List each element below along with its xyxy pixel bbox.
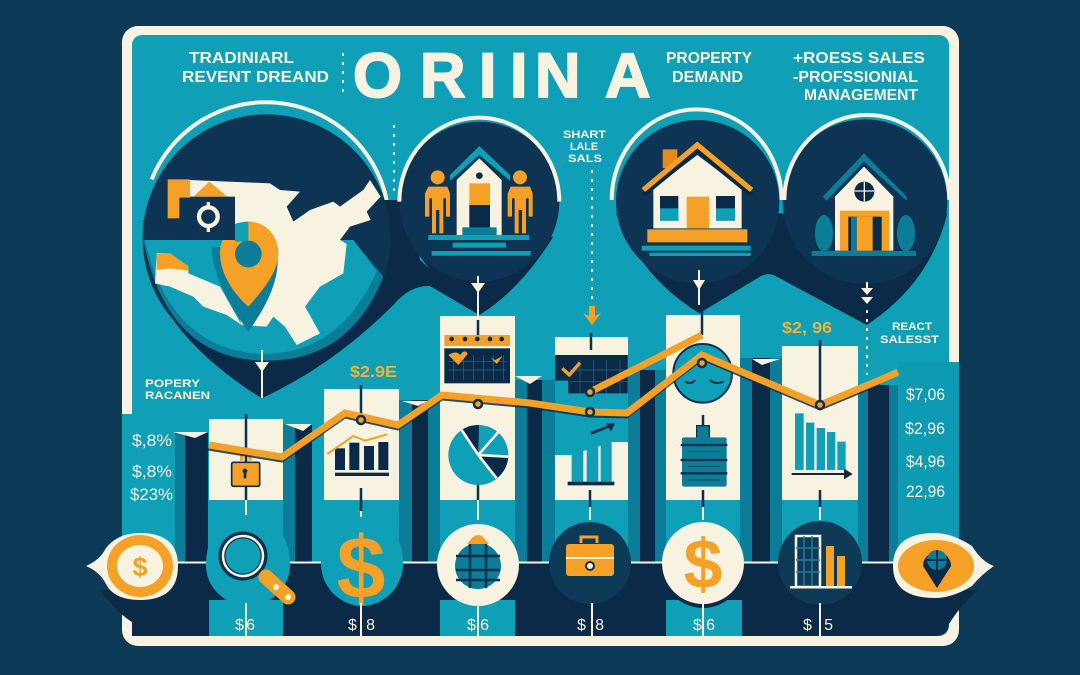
icon bubble: house with orange roof: [612, 109, 949, 325]
icon: house with trees: [812, 153, 916, 256]
value: 2.9E: $2.9E: [350, 364, 397, 381]
left value list: $23%: [130, 485, 173, 504]
text: react sales: [880, 321, 939, 346]
text: property vacancy: RACANEN: [145, 390, 210, 402]
text: short sale sales: LALE: [570, 141, 598, 153]
text: short sale sales: SHART: [563, 129, 606, 141]
right value list: $4,96: [906, 452, 945, 471]
step icon: cream dollar: [662, 522, 744, 608]
right value list: 22,96: [906, 482, 945, 501]
text: react sales: REACT: [892, 321, 932, 333]
text: professional management: MANAGEMENT: [804, 87, 918, 104]
house: [642, 145, 752, 256]
icon bubble: people and building: [399, 118, 559, 315]
text: property demand: DEMAND: [672, 69, 743, 86]
text: professional management: -PROFSSIONIAL: [793, 69, 918, 86]
bottom values: [235, 617, 833, 634]
icon: person left: [425, 170, 450, 233]
left value list: [130, 431, 173, 504]
map landmass: [190, 180, 381, 345]
panel: chart columns: [173, 358, 959, 563]
dark connector lines: [246, 300, 820, 524]
dotted guide lines: [343, 53, 867, 375]
step icon: globe: [437, 524, 519, 606]
text: property vacancy: POPERY: [145, 378, 201, 390]
chart nodes: [357, 359, 824, 424]
arrows from bubbles: [255, 270, 873, 398]
start badge: coin: $: [132, 552, 148, 582]
value: 2,96: $2, 96: [782, 320, 832, 337]
step icon: magnifier: [206, 515, 291, 606]
right value list: $7,06: [906, 385, 945, 404]
text: short sale sales: SALS: [568, 153, 602, 165]
bottom values: $ 8: [577, 617, 604, 634]
text: short sale sales: [563, 129, 606, 165]
step icon: building and bars: [778, 521, 862, 605]
text: property demand: PROPERTY: [666, 50, 752, 67]
panel: bottom band: [100, 562, 978, 636]
icon: round globe: [673, 344, 732, 403]
map location pin: [143, 179, 278, 332]
text: react sales: SALESST: [880, 334, 939, 346]
bottom values: $ 6: [693, 617, 715, 634]
icon: orange arrow: [583, 306, 601, 325]
icon: falling bar chart: [792, 413, 853, 479]
text: traditional revenue: [182, 50, 329, 86]
map bubble: [143, 102, 479, 398]
text: property vacancy: [145, 378, 210, 402]
start badge: coin: [86, 533, 178, 600]
panel: frame: [122, 26, 959, 646]
bottom values: $ 8: [348, 617, 375, 634]
text: property demand: [666, 50, 752, 86]
icon: calendar: [444, 335, 510, 383]
icon: building: [428, 146, 531, 256]
heading: title: ORIINA: [353, 41, 650, 111]
text: traditional revenue: TRADINIARL: [189, 50, 294, 67]
end badge: location: [893, 533, 994, 598]
bottom tick lines: [246, 603, 820, 636]
bottom values: $ 6: [235, 617, 255, 634]
text: traditional revenue: REVENT DREAND: [182, 69, 329, 86]
bottom values: $ 6: [467, 617, 489, 634]
text: professional management: +ROESS SALES: [793, 50, 925, 67]
panel: bars: [209, 315, 858, 505]
right value list: $2,96: [905, 419, 945, 438]
icon: checklist calendar: [555, 355, 628, 393]
left value list: $,8%: [132, 462, 172, 481]
icon: server box: [681, 426, 727, 487]
icon: growth chart: [568, 423, 615, 485]
step icon: dollar: [321, 517, 403, 617]
bottom values: $ 5: [803, 617, 833, 634]
text: professional management: [793, 50, 925, 104]
line chart: orange trends: [208, 335, 898, 461]
right value list: [905, 385, 945, 501]
icon: pie chart: [448, 425, 508, 485]
step icon: briefcase: [549, 522, 631, 604]
step icon: dollar: $: [337, 518, 385, 617]
map southern strip: [155, 253, 242, 325]
icon: padlock: [232, 452, 260, 486]
icon: person right: [508, 170, 533, 233]
left value list: $,8%: [132, 431, 172, 450]
step icon: cream dollar: $: [684, 525, 722, 603]
icon: rising bar chart: [327, 434, 389, 476]
